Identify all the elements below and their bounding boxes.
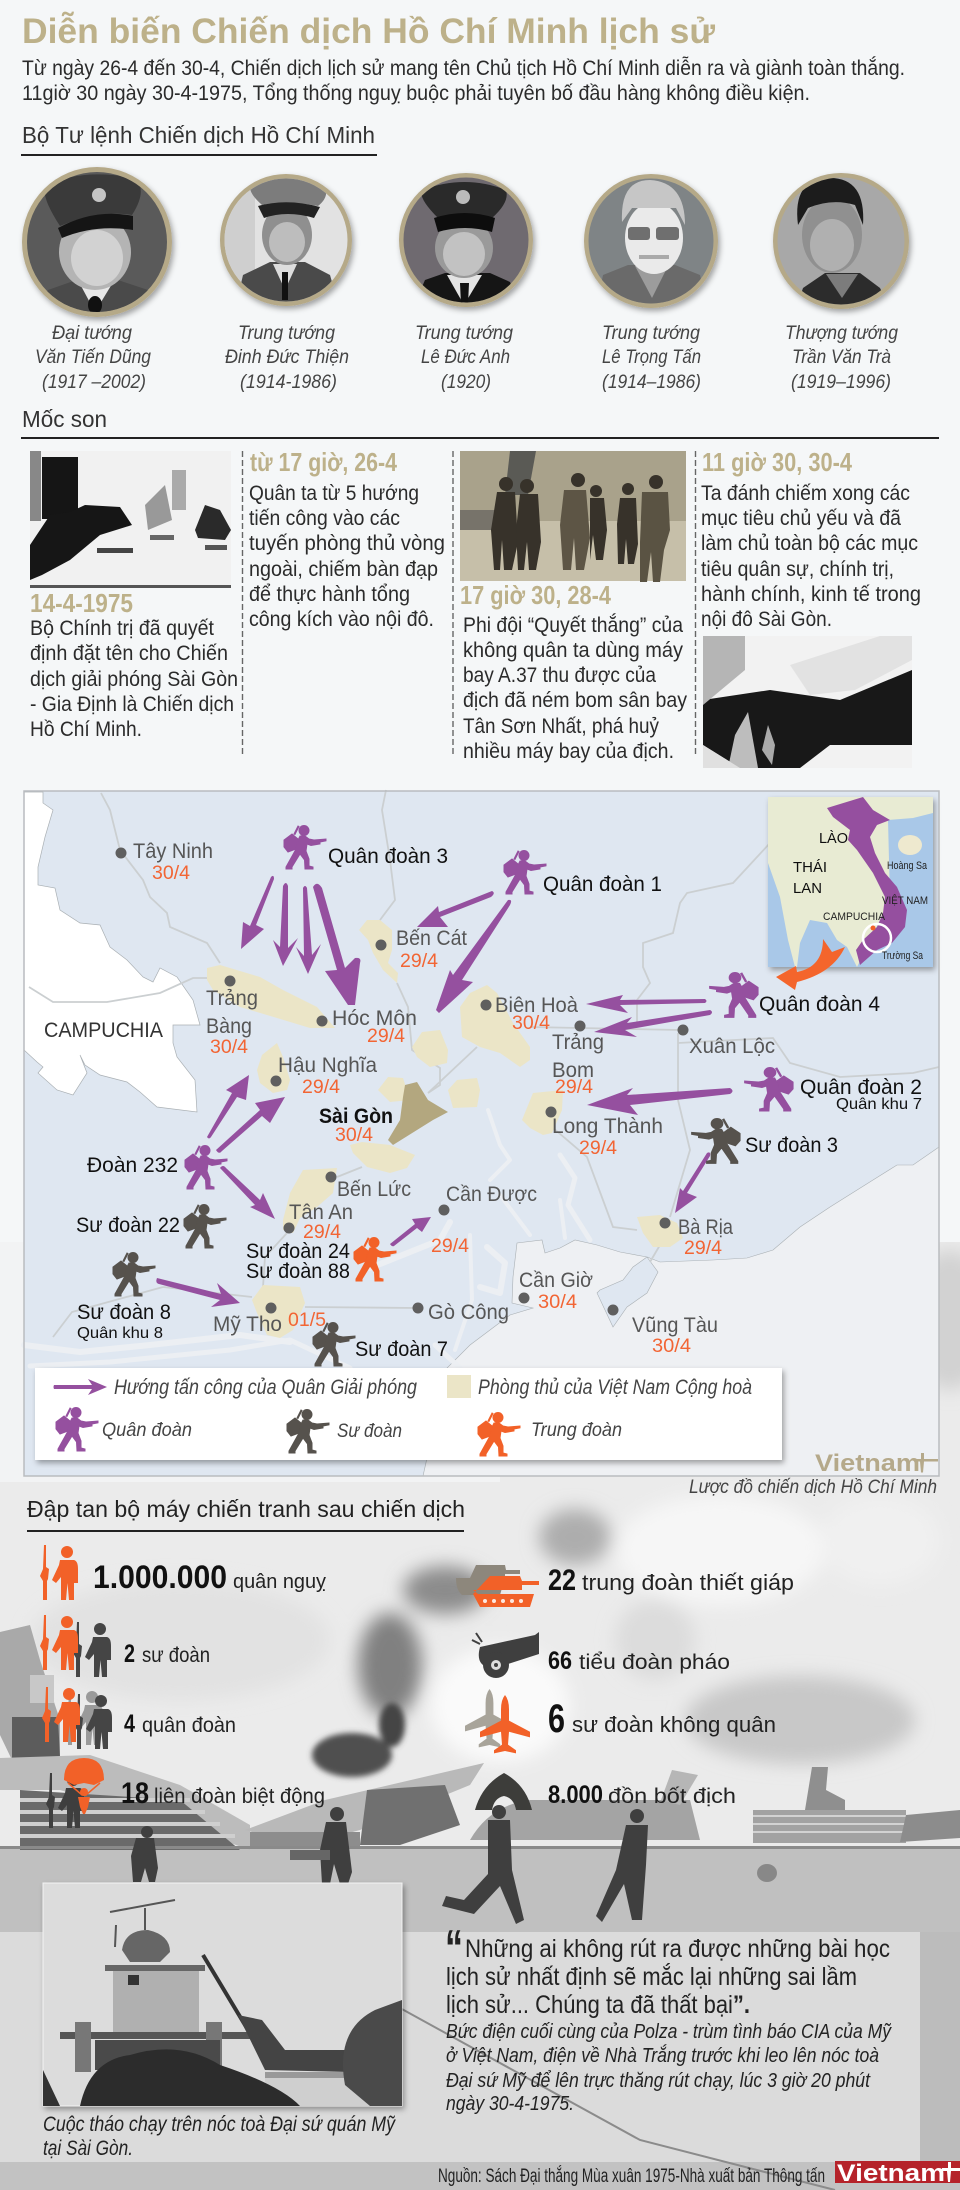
commander captions	[35, 323, 898, 393]
arrow: inset to map	[776, 939, 845, 990]
caption 4: Lê Trọng Tấn	[602, 347, 701, 368]
unit labels: Quân đoàn 2	[800, 1076, 922, 1099]
stat: 6 sư đoàn không quân: sư đoàn không quân	[572, 1712, 776, 1737]
body text: bay A.37 thu được của	[463, 664, 656, 687]
place labels: Hóc Môn	[332, 1007, 417, 1030]
caption 1: (1917 –2002)	[42, 372, 146, 393]
photo caption	[43, 2113, 396, 2160]
photo: Independence Palace	[703, 636, 912, 768]
stat: 2 sư đoàn: 2	[124, 1640, 135, 1668]
place labels: 30/4	[512, 1013, 550, 1034]
inset locator map: CAMPUCHIA	[823, 911, 886, 923]
place labels: CAMPUCHIA	[44, 1019, 163, 1042]
light overlay on the lower tarmac	[0, 1932, 920, 2162]
heading: commanders: Bộ Tư lệnh Chiến dịch Hồ Chí Minh	[22, 122, 375, 148]
body text: công kích vào nội đô.	[249, 608, 434, 631]
caption 3: (1920)	[441, 372, 491, 393]
quote attribution: ngày 30-4-1975.	[446, 2093, 574, 2115]
stat: 66 tiểu đoàn pháo: 66	[548, 1647, 572, 1675]
icon: bunker	[475, 1773, 532, 1810]
aircraft and buildings on the airfield	[0, 1625, 960, 1850]
place labels	[44, 840, 775, 1357]
icon: aircraft	[465, 1689, 530, 1753]
quote: “	[445, 1920, 463, 1976]
inset locator map	[768, 797, 933, 967]
icon: soldier	[40, 1545, 78, 1600]
place labels: Mỹ Tho	[213, 1313, 282, 1336]
body text: Phi đội “Quyết thắng” của	[463, 614, 683, 637]
body text: định đặt tên cho Chiến	[30, 642, 228, 665]
unit labels: Sư đoàn 7	[355, 1338, 448, 1361]
caption 3	[415, 323, 513, 393]
body text: dịch giải phóng Sài Gòn	[30, 668, 238, 691]
place labels: Bàng	[206, 1015, 252, 1038]
Cambodia territory	[24, 792, 200, 1112]
caption 2	[225, 323, 349, 393]
heading: war machine destroyed: Đập tan bộ máy chiến tranh sau chiến dịch	[27, 1496, 465, 1522]
stat: 66 tiểu đoàn pháo	[472, 1632, 730, 1678]
stat: 18 liên đoàn biệt động: 18	[121, 1777, 149, 1810]
icon: tanks	[456, 1565, 539, 1607]
inset locator map: Trường Sa	[882, 950, 924, 962]
place labels: 30/4	[652, 1336, 691, 1357]
unit labels: Quân đoàn 4	[759, 993, 880, 1016]
place labels: 01/5	[288, 1310, 326, 1331]
caption 1	[35, 323, 151, 393]
caption 3: Trung tướng	[415, 323, 513, 344]
body text	[463, 614, 687, 763]
quote	[445, 1920, 890, 2019]
date: 11 giờ 30, 30-4	[702, 447, 852, 477]
body text: Ta đánh chiếm xong các	[701, 482, 910, 505]
icon: soldiers	[40, 1615, 111, 1677]
stat: 2 sư đoàn	[40, 1615, 210, 1677]
place labels: 29/4	[367, 1026, 405, 1047]
caption 2: (1914-1986)	[240, 372, 337, 393]
intro text: 11giờ 30 ngày 30-4-1975, Tổng thống nguỵ buộc phải tuyên bố đầu hàng không điều kiện.	[22, 82, 810, 105]
body text	[701, 482, 921, 631]
date: từ 17 giờ, 26-4	[250, 447, 397, 477]
place labels: Cần Được	[446, 1183, 537, 1206]
map credit logo: Vietnam	[815, 1450, 920, 1477]
unit labels: Quân đoàn 1	[543, 873, 662, 896]
body text: Bộ Chính trị đã quyết	[30, 617, 214, 640]
stat: 2 sư đoàn: sư đoàn	[142, 1644, 210, 1667]
caption 5	[785, 323, 898, 393]
intro text: Từ ngày 26-4 đến 30-4, Chiến dịch lịch sử mang tên Chủ tịch Hồ Chí Minh diễn ra và giành toàn thắng.	[22, 57, 905, 80]
stat: 8.000 đồn bốt địch	[475, 1773, 736, 1810]
stat: 4 quân đoàn	[42, 1687, 236, 1749]
body text: hành chính, kinh tế trong	[701, 583, 921, 606]
inset locator map: Hoàng Sa	[887, 860, 928, 872]
panel: milestone 14-4-1975	[30, 451, 238, 741]
place labels: 30/4	[335, 1125, 373, 1146]
caption 3: Lê Đức Anh	[421, 347, 510, 368]
place labels: Trảng	[206, 987, 258, 1010]
date: 14-4-1975	[30, 588, 133, 618]
body text: nội đô Sài Gòn.	[701, 608, 832, 631]
caption 5: Thượng tướng	[785, 323, 898, 344]
legend arrow	[54, 1379, 107, 1395]
unit labels: Sư đoàn 8	[77, 1301, 171, 1324]
place labels: 29/4	[579, 1138, 617, 1159]
body text: - Gia Định là Chiến dịch	[30, 693, 234, 716]
inset locator map: LÀO	[819, 830, 848, 847]
milestone dividers	[242, 451, 696, 756]
unit labels: Sư đoàn 3	[745, 1134, 838, 1157]
place labels: Trảng	[552, 1031, 604, 1054]
unit labels: Đoàn 232	[87, 1154, 178, 1177]
stat: 6 sư đoàn không quân	[465, 1689, 776, 1753]
stat: 22 trung đoàn thiết giáp: 22	[548, 1564, 576, 1597]
photo: pilots walking	[460, 451, 686, 582]
body text: để thực hành tổng	[249, 583, 410, 606]
background photo: burning airfield	[0, 1242, 960, 2190]
unit labels: Quân khu 8	[77, 1325, 163, 1342]
portrait 3: Lê Đức Anh	[395, 170, 540, 310]
stat: 4 quân đoàn: quân đoàn	[142, 1714, 236, 1737]
body text: tuyến phòng thủ vòng	[249, 532, 445, 555]
place labels: Bến Cát	[396, 927, 467, 950]
stat: 8.000 đồn bốt địch: 8.000	[548, 1781, 603, 1809]
caption 4: Trung tướng	[602, 323, 700, 344]
caption 1: Văn Tiến Dũng	[35, 347, 151, 368]
date: 17 giờ 30, 28-4	[460, 580, 611, 610]
body text: nhiều máy bay của địch.	[463, 740, 674, 763]
intro text	[22, 57, 905, 105]
body text: làm chủ toàn bộ các mục	[701, 532, 918, 555]
soldiers running on the tarmac	[131, 1805, 777, 1924]
caption 2: Trung tướng	[238, 323, 335, 344]
body text: ngoài, chiếm bàn đạp	[249, 558, 438, 581]
legend: Hướng tấn công của Quân Giải phóng	[114, 1376, 417, 1399]
quote: lịch sử nhất định sẽ mắc lại những sai lầm	[446, 1962, 857, 1991]
footer logo: Vietnam	[837, 2160, 945, 2187]
map sea and land base	[24, 791, 939, 1476]
place labels: Xuân Lộc	[689, 1035, 775, 1058]
place labels: Tân An	[289, 1201, 353, 1224]
body text	[249, 482, 445, 631]
rivers	[24, 1110, 590, 1368]
legend: corps	[56, 1408, 98, 1451]
defense zones	[207, 920, 683, 1338]
place labels: 30/4	[210, 1037, 248, 1058]
unit labels: Sư đoàn 24	[246, 1240, 350, 1263]
place labels: 30/4	[152, 863, 190, 884]
caption 5: (1919–1996)	[791, 372, 891, 393]
place labels: 29/4	[555, 1077, 593, 1098]
portrait 5: Trần Văn Trà	[770, 170, 915, 315]
stat: 1.000.000: 1.000.000	[93, 1559, 227, 1595]
legend: division	[287, 1410, 329, 1453]
body text: Tân Sơn Nhất, phá huỷ	[463, 715, 659, 738]
caption 2: Đinh Đức Thiện	[225, 347, 349, 368]
stat: 4 quân đoàn: 4	[124, 1710, 135, 1738]
unit labels: Sư đoàn 22	[76, 1214, 180, 1237]
caption 4: (1914–1986)	[602, 372, 701, 393]
place labels: 29/4	[431, 1236, 469, 1257]
panel: milestone 17 giờ 30, 28-4	[460, 451, 687, 763]
quote: lịch sử... Chúng ta đã thất bại”.	[446, 1991, 750, 2019]
title: Diễn biến Chiến dịch Hồ Chí Minh lịch sử	[22, 11, 716, 51]
body text: không quân ta dùng máy	[463, 639, 683, 662]
quote attribution: ở Việt Nam, điện về Nhà Trắng trước khi leo lên nóc toà	[446, 2044, 879, 2067]
stat: 22 trung đoàn thiết giáp: trung đoàn thiết giáp	[582, 1570, 794, 1595]
legend: Trung đoàn	[531, 1420, 622, 1441]
unit labels	[76, 845, 922, 1361]
soldier icons	[113, 826, 793, 1366]
place labels: Tây Ninh	[133, 840, 213, 863]
southern sea area	[423, 1147, 939, 1476]
photo: Politburo meeting	[30, 451, 231, 588]
icon: cannon	[472, 1632, 539, 1678]
quote attribution: Bức điện cuối cùng của Polza - trùm tình báo CIA của Mỹ	[446, 2021, 892, 2043]
body text	[30, 617, 238, 741]
sky haze over the top of the photo	[0, 1242, 500, 1482]
body text: tiến công vào các	[249, 507, 400, 530]
stat: 1.000.000	[40, 1545, 326, 1600]
stat: 22 trung đoàn thiết giáp	[456, 1564, 794, 1607]
caption 4	[602, 323, 701, 393]
body text: mục tiêu chủ yếu và đã	[701, 507, 901, 530]
place labels: 29/4	[684, 1238, 722, 1259]
caption 5: Trần Văn Trà	[792, 347, 891, 368]
stat: 8.000 đồn bốt địch: đồn bốt địch	[608, 1785, 736, 1808]
place labels: 29/4	[302, 1077, 340, 1098]
body text: Quân ta từ 5 hướng	[249, 482, 419, 505]
place labels: Bom	[552, 1059, 594, 1082]
inset locator map: VIỆT NAM	[882, 894, 928, 907]
panel: milestone 11 giờ 30, 30-4	[701, 447, 921, 768]
legend	[35, 1368, 782, 1460]
inset locator map: THÁI	[793, 859, 827, 876]
panel: milestone từ 17 giờ, 26-4	[249, 447, 445, 631]
quote attribution: Đại sứ Mỹ để lên trực thăng rút chạy, lúc 3 giờ 20 phút	[446, 2070, 871, 2092]
heading: milestones: Mốc son	[22, 406, 107, 432]
portrait 1: Văn Tiến Dũng	[20, 165, 175, 330]
place labels: 29/4	[303, 1222, 341, 1243]
icon: soldiers	[42, 1687, 112, 1749]
attack arrows	[156, 876, 733, 1307]
photo caption: Cuộc tháo chạy trên nóc toà Đại sứ quán Mỹ	[43, 2113, 396, 2136]
legend: regiment	[478, 1412, 520, 1456]
map caption: Lược đồ chiến dịch Hồ Chí Minh	[689, 1477, 937, 1498]
place labels: Vũng Tàu	[632, 1314, 718, 1337]
body text: Hồ Chí Minh.	[30, 718, 142, 741]
unit labels: Sư đoàn 88	[246, 1260, 350, 1283]
panel: campaign map	[24, 790, 939, 1477]
inset locator map: LAN	[793, 880, 822, 897]
map border	[24, 791, 939, 1476]
quote attribution	[446, 2021, 892, 2115]
place labels: Bà Rịa	[678, 1216, 733, 1239]
photo caption: tại Sài Gòn.	[43, 2137, 133, 2160]
unit labels: Quân khu 7	[836, 1096, 922, 1113]
icon: parachutists	[46, 1758, 104, 1828]
unit labels: Quân đoàn 3	[328, 845, 448, 868]
place labels: Gò Công	[428, 1301, 509, 1324]
roads	[29, 790, 939, 1337]
portrait 4: Lê Trọng Tấn	[580, 170, 725, 310]
stat: 6 sư đoàn không quân: 6	[548, 1697, 565, 1741]
place labels: Sài Gòn	[319, 1105, 393, 1128]
place labels: Bến Lức	[337, 1178, 411, 1201]
legend swatch	[447, 1375, 471, 1398]
city dots	[116, 848, 688, 1316]
body text: tiêu quân sự, chính trị,	[701, 558, 894, 581]
stat: 18 liên đoàn biệt động	[46, 1758, 325, 1828]
place labels: Biên Hoà	[495, 994, 578, 1017]
place labels: Cần Giờ	[519, 1269, 593, 1292]
stat: 66 tiểu đoàn pháo: tiểu đoàn pháo	[579, 1651, 730, 1674]
caption 1: Đại tướng	[52, 323, 132, 344]
photo: embassy rooftop evacuation	[43, 1883, 402, 2106]
ground band	[0, 1849, 960, 1932]
place labels: 30/4	[538, 1292, 577, 1313]
Sài Gòn zone	[388, 1082, 448, 1145]
place labels: Hậu Nghĩa	[278, 1054, 377, 1077]
place labels: 29/4	[400, 951, 438, 972]
legend: Sư đoàn	[337, 1421, 402, 1442]
place labels: Long Thành	[552, 1115, 663, 1138]
stat: 1.000.000: quân nguỵ	[233, 1571, 326, 1593]
legend: Phòng thủ của Việt Nam Cộng hoà	[478, 1376, 752, 1399]
body text: địch đã ném bom sân bay	[463, 689, 687, 712]
quote: Những ai không rút ra được những bài học	[465, 1935, 890, 1963]
legend: Quân đoàn	[102, 1420, 192, 1441]
portrait 2: Đinh Đức Thiện	[215, 170, 360, 310]
stat: 18 liên đoàn biệt động: liên đoàn biệt động	[154, 1785, 325, 1808]
